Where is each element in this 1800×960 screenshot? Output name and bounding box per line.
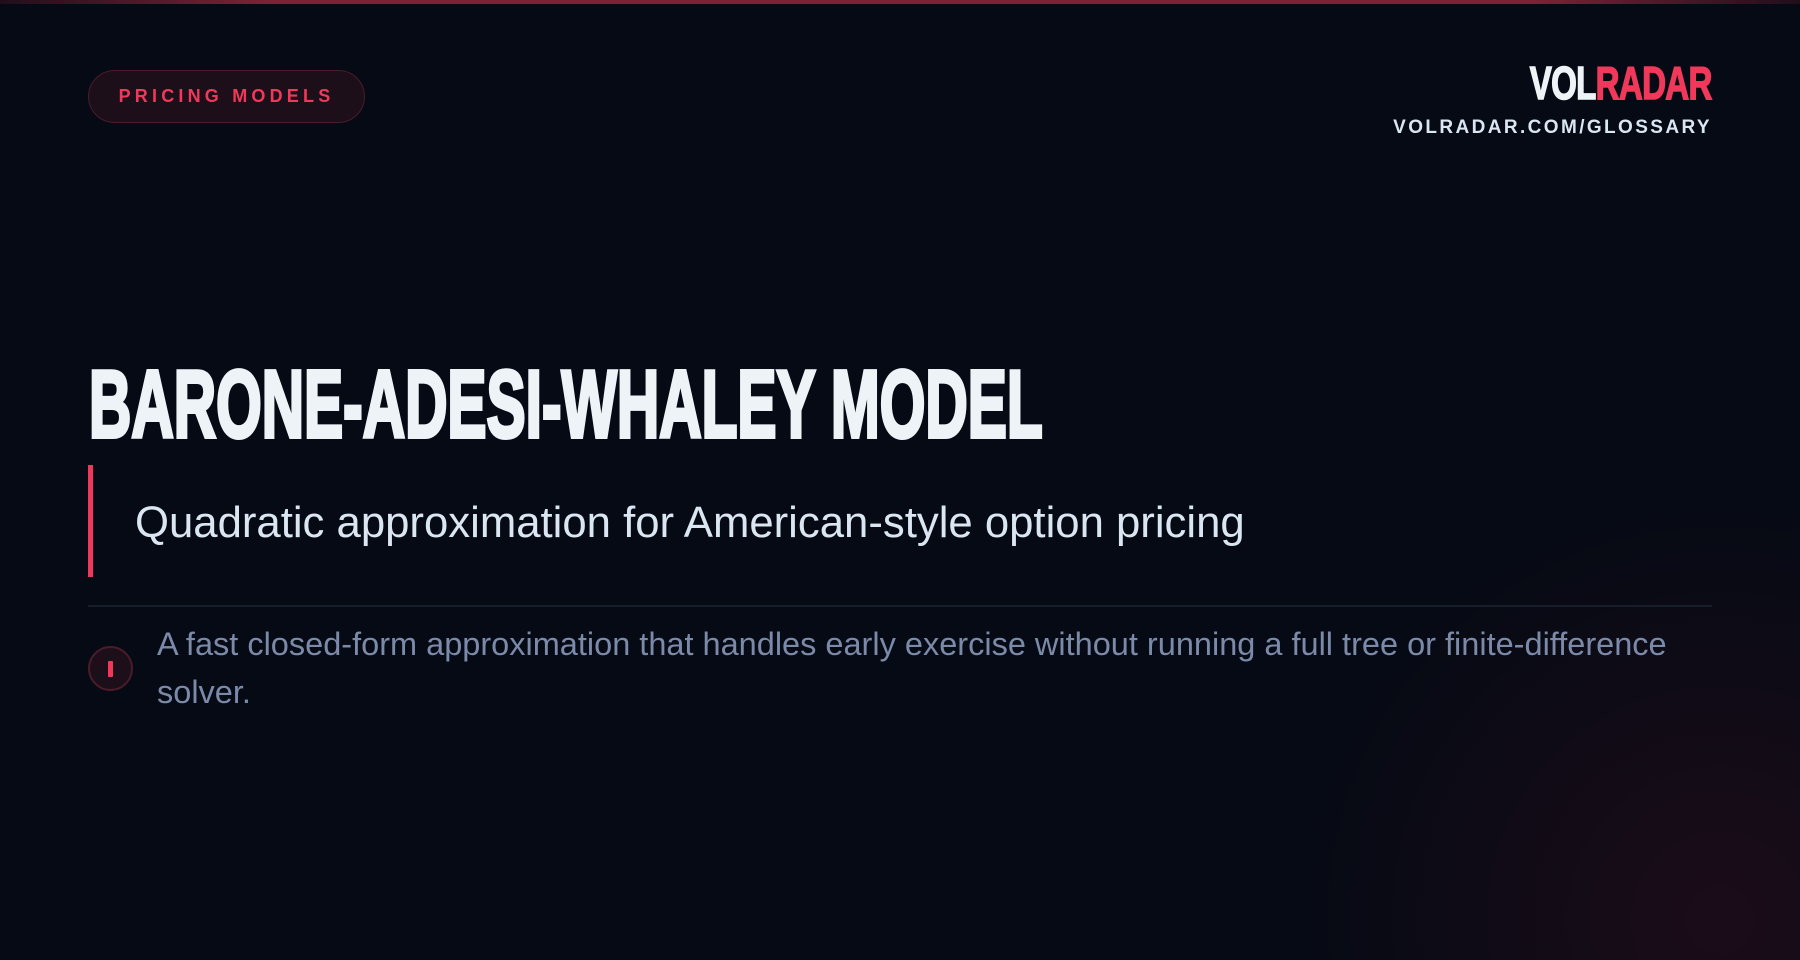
subtitle: Quadratic approximation for American-style option pricing [135, 498, 1245, 547]
title: BARONE-ADESI-WHALEY MODEL [89, 351, 1043, 458]
description text: A fast closed-form approximation that handles early exercise without running a full tree or finite-difference solver. [157, 626, 1667, 710]
site url: VOLRADAR.COM/GLOSSARY [1393, 117, 1712, 138]
accent bar [88, 465, 93, 577]
icon: info [88, 646, 133, 691]
logo: VOLRADAR [1530, 57, 1712, 109]
category pill: PRICING MODELS [119, 86, 334, 106]
category pill [88, 70, 365, 123]
